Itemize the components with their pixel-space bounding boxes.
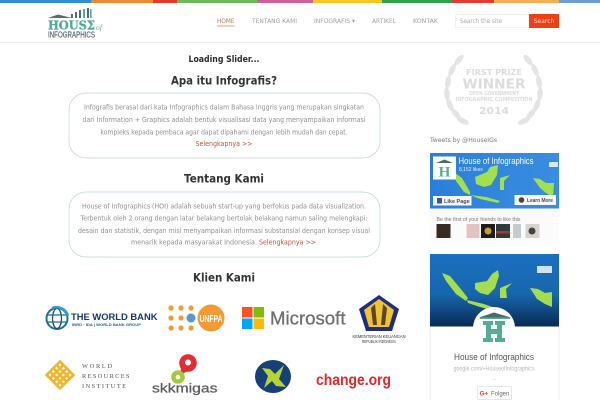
panel: Tentang Kami: House of Infographics (HOI) adalah sebuah start-up yang berfokus pada data visualization. — [82, 202, 366, 210]
like button — [433, 196, 472, 206]
logo: XL — [255, 360, 291, 393]
award badge: first prize winner: FIRST PRIZE — [466, 68, 522, 77]
award badge: first prize winner — [444, 53, 543, 126]
logo: The World Bank: THE WORLD BANK — [71, 312, 158, 323]
navigation menu: ARTIKEL — [372, 18, 396, 25]
logo: House of Infographics — [48, 8, 103, 40]
panel: Apa itu Infografis: Selengkapnya >> — [196, 140, 252, 148]
logo: The World Bank: IBRD · IDA | WORLD BANK GROUP — [72, 323, 141, 327]
award badge: first prize winner: WINNER — [462, 76, 526, 92]
navigation menu: KONTAK — [413, 18, 439, 25]
heading: Klien Kami: Klien Kami — [193, 270, 255, 284]
learn more button — [514, 195, 556, 205]
top colour strip — [0, 0, 600, 3]
logo: UNFPA — [168, 304, 224, 332]
heading: Tentang Kami: Tentang Kami — [184, 172, 264, 186]
award badge: first prize winner: 2014 — [479, 106, 509, 117]
navigation menu: INFOGRAFIS ▾ — [314, 18, 356, 25]
logo: Kementerian Keuangan: REPUBLIK INDONESIA — [362, 339, 396, 344]
logo: World Resources Institute: INSTITUTE — [82, 383, 126, 390]
panel: Tentang Kami — [69, 192, 380, 257]
navigation menu: HOME — [217, 18, 235, 25]
page title: House of Infographics — [458, 156, 534, 166]
logo: Kementerian Keuangan: KEMENTERIAN KEUANGAN — [352, 334, 406, 339]
logo: House of Infographics: of — [96, 23, 103, 32]
map of Indonesia — [442, 270, 552, 311]
logo: World Resources Institute — [46, 361, 130, 390]
logo: change.org: change.org — [316, 372, 391, 389]
logo: SKK Migas — [152, 354, 218, 396]
logo: World Resources Institute: RESOURCES — [82, 373, 130, 380]
tweets link: Tweets by @HouseIGs — [429, 136, 497, 144]
profile circle with H logo — [473, 307, 515, 349]
map of Indonesia — [455, 165, 554, 203]
search box: Search the site — [460, 18, 502, 25]
search box: Search — [534, 18, 554, 25]
logo: Microsoft: Microsoft — [270, 308, 346, 328]
panel: Apa itu Infografis — [69, 93, 380, 158]
friends line: Be the first of your friends to like this — [436, 217, 521, 223]
navigation menu — [217, 18, 439, 26]
logo: SKK Migas: skkmigas — [152, 380, 218, 396]
panel: Tentang Kami: Terbentuk oleh 2 orang dengan latar belakang bertolak belakang namun saling melengkapi: — [80, 214, 368, 222]
friend avatars — [436, 224, 540, 238]
navigation menu: TENTANG KAMI — [251, 18, 297, 25]
logo: House of Infographics: HOUSΣ — [48, 18, 95, 32]
page logo — [433, 156, 456, 180]
panel: Facebook page widget: H — [439, 164, 451, 180]
panel: Tentang Kami: Selengkapnya >> — [259, 238, 316, 246]
panel: Apa itu Infografis: Infografis berasal dari kata Infographics dalam Bahasa Inggris yang merupakan singkatan — [84, 104, 364, 112]
logo: The World Bank — [46, 307, 158, 329]
profile name: House of Infographics — [454, 352, 535, 362]
panel: Google Plus widget: G+ — [480, 390, 489, 398]
logo: UNFPA: UNFPA — [200, 313, 223, 325]
follow button — [478, 386, 512, 400]
panel: Apa itu Infografis: dari Information + Graphics adalah bentuk visualisasi data yang menyampaikan informasi — [82, 116, 366, 124]
heading: Apa itu Infografis: Apa itu Infografis? — [171, 74, 277, 88]
panel: Facebook page widget: Like Page — [444, 199, 470, 205]
slider loading text: Loading Slider... — [188, 55, 260, 65]
logo: Microsoft — [242, 307, 346, 329]
panel: Tentang Kami: menarik kepada masyarakat Indonesia. — [131, 238, 257, 246]
panel: Google Plus widget: ... — [491, 376, 497, 382]
search box — [456, 14, 559, 28]
award badge: first prize winner: OPEN GOVERNMENT — [469, 91, 520, 97]
header bar — [0, 3, 600, 43]
panel: Facebook page widget: 8,152 likes — [459, 167, 483, 173]
logo: House of Infographics: INFOGRAPHICS — [48, 30, 95, 40]
panel: Google Plus widget: Folgen — [491, 392, 509, 398]
panel: Google Plus widget — [430, 254, 559, 400]
panel: Facebook page widget — [430, 153, 559, 241]
panel: Apa itu Infografis: kompleks kepada pembaca agar dapat dipahami dengan lebih mudah dan cepat. — [100, 128, 348, 136]
award badge: first prize winner: INFOGRAPHIC COMPETITION — [456, 97, 532, 103]
panel: Tentang Kami: desain dan statistik, dengan misi menyampaikan informasi substansial dengan konsep visual — [78, 227, 370, 235]
profile url: google.com/+HouseofInfographics — [454, 366, 534, 372]
logo: World Resources Institute: WORLD — [82, 363, 112, 370]
logo: Kementerian Keuangan — [352, 295, 406, 344]
panel: Facebook page widget: Learn More — [527, 198, 553, 204]
